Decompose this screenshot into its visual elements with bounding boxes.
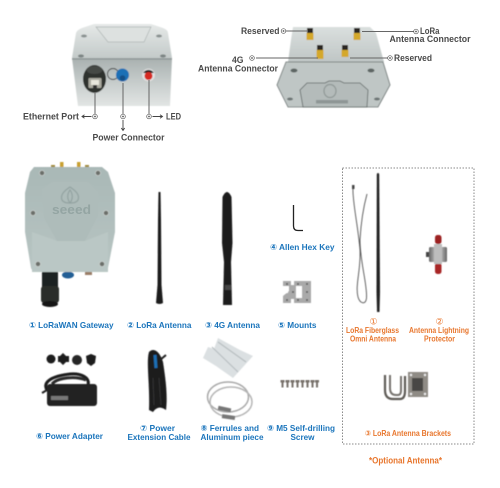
label: LoRa antenna: ② LoRa Antenna bbox=[127, 320, 192, 330]
icon: power extension cable bbox=[148, 350, 167, 412]
icon: power adapter with plugs bbox=[42, 353, 97, 406]
LED callout: LED bbox=[166, 112, 181, 122]
label: allen hex key: ④ Allen Hex Key bbox=[270, 242, 335, 252]
icon: 4G antenna bbox=[222, 192, 232, 305]
icon: ferrules and aluminum piece bbox=[203, 338, 253, 420]
icon: mounts bbox=[283, 281, 311, 303]
label: LoRa fiberglass omni antenna: ① bbox=[370, 316, 378, 326]
4G antenna connector callout: 4G bbox=[232, 55, 244, 66]
icon: LoRa fiberglass omni antenna bbox=[352, 173, 380, 312]
label: LoRa fiberglass omni antenna bbox=[346, 316, 399, 344]
ethernet port callout: Ethernet Port bbox=[23, 112, 80, 122]
4G antenna connector callout bbox=[198, 55, 318, 74]
LoRa antenna connector callout: LoRa bbox=[420, 26, 440, 37]
label: LoRa fiberglass omni antenna: LoRa Fiberglass bbox=[346, 326, 399, 335]
reserved callout right bbox=[350, 53, 432, 64]
photo: gateway top view with antenna connectors bbox=[277, 27, 390, 107]
label: LoRa antenna brackets: ③ LoRa Antenna Brackets bbox=[365, 429, 451, 438]
label: M5 self-drilling screw: ⑨ M5 Self-drilling bbox=[267, 423, 335, 433]
reserved callout top bbox=[241, 26, 307, 37]
icon: LoRa antenna brackets bbox=[385, 372, 428, 399]
reserved callout right: Reserved bbox=[394, 53, 432, 64]
panel: optional antenna dotted frame bbox=[342, 168, 474, 444]
LED callout bbox=[147, 80, 181, 122]
gateway logo wordmark: seeed bbox=[52, 202, 91, 217]
icon: allen hex key bbox=[294, 205, 303, 230]
icon: LoRa antenna bbox=[156, 192, 163, 304]
icon: antenna lightning protector bbox=[426, 235, 447, 274]
ethernet port callout bbox=[23, 92, 97, 122]
4G antenna connector callout: Antenna Connector bbox=[198, 64, 278, 74]
label: antenna lightning protector bbox=[409, 316, 469, 344]
icon: M5 self-drilling screws bbox=[281, 380, 318, 387]
photo: gateway bottom view with ports bbox=[72, 24, 172, 106]
power connector callout: Power Connector bbox=[92, 132, 165, 144]
label: LoRa fiberglass omni antenna: Omni Antenna bbox=[350, 334, 396, 344]
LoRa antenna connector callout bbox=[362, 26, 471, 45]
label: ferrules and aluminum piece: Aluminum piece bbox=[200, 432, 264, 442]
label: ferrules and aluminum piece bbox=[200, 423, 264, 442]
label: antenna lightning protector: Antenna Lightning bbox=[409, 326, 469, 335]
label: power extension cable: Extension Cable bbox=[128, 432, 191, 442]
label: LoRaWAN gateway: ① LoRaWAN Gateway bbox=[29, 320, 114, 330]
label: power adapter: ⑥ Power Adapter bbox=[36, 431, 104, 441]
label: mounts: ⑤ Mounts bbox=[278, 320, 317, 330]
label: M5 self-drilling screw bbox=[267, 423, 335, 442]
caption: optional antenna: *Optional Antenna* bbox=[369, 456, 442, 466]
power connector callout bbox=[92, 83, 165, 144]
label: power extension cable bbox=[128, 423, 191, 442]
label: antenna lightning protector: ② bbox=[436, 316, 444, 326]
label: M5 self-drilling screw: Screw bbox=[290, 432, 315, 442]
label: power extension cable: ⑦ Power bbox=[140, 423, 176, 433]
label: antenna lightning protector: Protector bbox=[424, 334, 455, 344]
photo: LoRaWAN gateway front bbox=[25, 162, 115, 307]
label: 4G antenna: ③ 4G Antenna bbox=[205, 320, 260, 330]
reserved callout top: Reserved bbox=[241, 26, 280, 37]
LoRa antenna connector callout: Antenna Connector bbox=[390, 34, 471, 45]
label: ferrules and aluminum piece: ⑧ Ferrules and bbox=[200, 423, 259, 433]
